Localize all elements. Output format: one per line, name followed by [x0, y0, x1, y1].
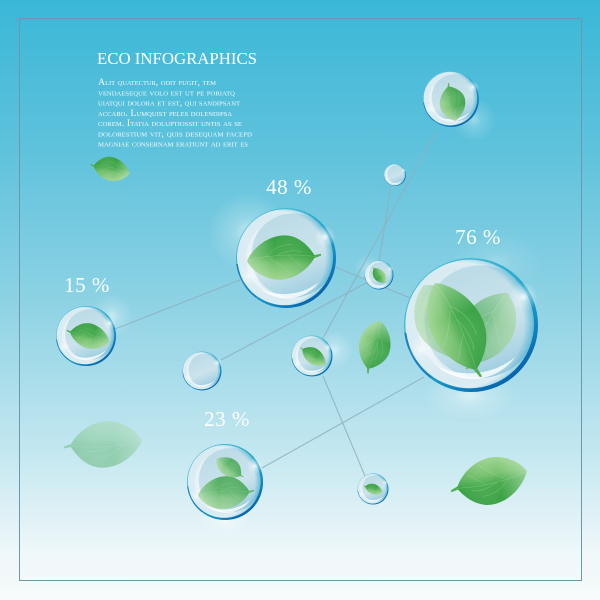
percent 76: 76 %: [455, 225, 501, 249]
percent 23: 23 %: [204, 407, 250, 431]
bubble 76 percent: [401, 258, 538, 392]
small bubble near top: [384, 164, 406, 186]
glows: [90, 98, 543, 534]
floating pale leaf bottom left: [64, 421, 142, 468]
body text block: magniae consernam eratiunt ad erit es: [98, 138, 248, 148]
body text block: [98, 77, 253, 148]
floating leaf middle: [351, 316, 398, 378]
bubble 15 percent: [56, 306, 116, 366]
floating leaf bottom right: [447, 452, 532, 511]
body text block: corem. Itatia doluptiossit untis as se: [98, 118, 242, 128]
small bubble with leaf centre: [364, 260, 394, 290]
leaf medium: [296, 341, 330, 370]
leaf in bubble 15: [64, 320, 112, 352]
leaf in bubble 48: [247, 235, 321, 280]
medium bubble with leaf: [292, 336, 332, 376]
leaf small centre: [369, 264, 389, 287]
small bottom bubble with leaf: [358, 474, 388, 504]
leaf in top right bubble: [434, 80, 470, 124]
percent 15: 15 %: [64, 273, 110, 297]
leaves in bubble 76: [401, 271, 528, 388]
leaf small bottom: [362, 481, 384, 496]
empty bubble: [182, 352, 222, 390]
bubble top right: [423, 71, 479, 127]
body text block: dolorestium vit, quis desequam facepd: [98, 128, 253, 138]
bubble 48 percent: [236, 208, 336, 308]
connector lines: [115, 130, 437, 476]
percent 48: 48 %: [266, 175, 312, 199]
leaves in bubble 23: [198, 451, 254, 509]
bubble 23 percent: [187, 444, 263, 520]
body text block: vendaeseque volo est ut pe poriatq: [98, 87, 236, 97]
title: ECO INFOGRAPHICS: [97, 49, 257, 68]
body text block: uiatqui dolora et est, qui sandipsant: [98, 98, 240, 108]
floating leaf top left: [89, 154, 132, 183]
body text block: Alit quatectur, odit fugit, tem: [98, 77, 217, 87]
body text block: accabo. Lumquist peles dolendipsa: [98, 108, 233, 118]
